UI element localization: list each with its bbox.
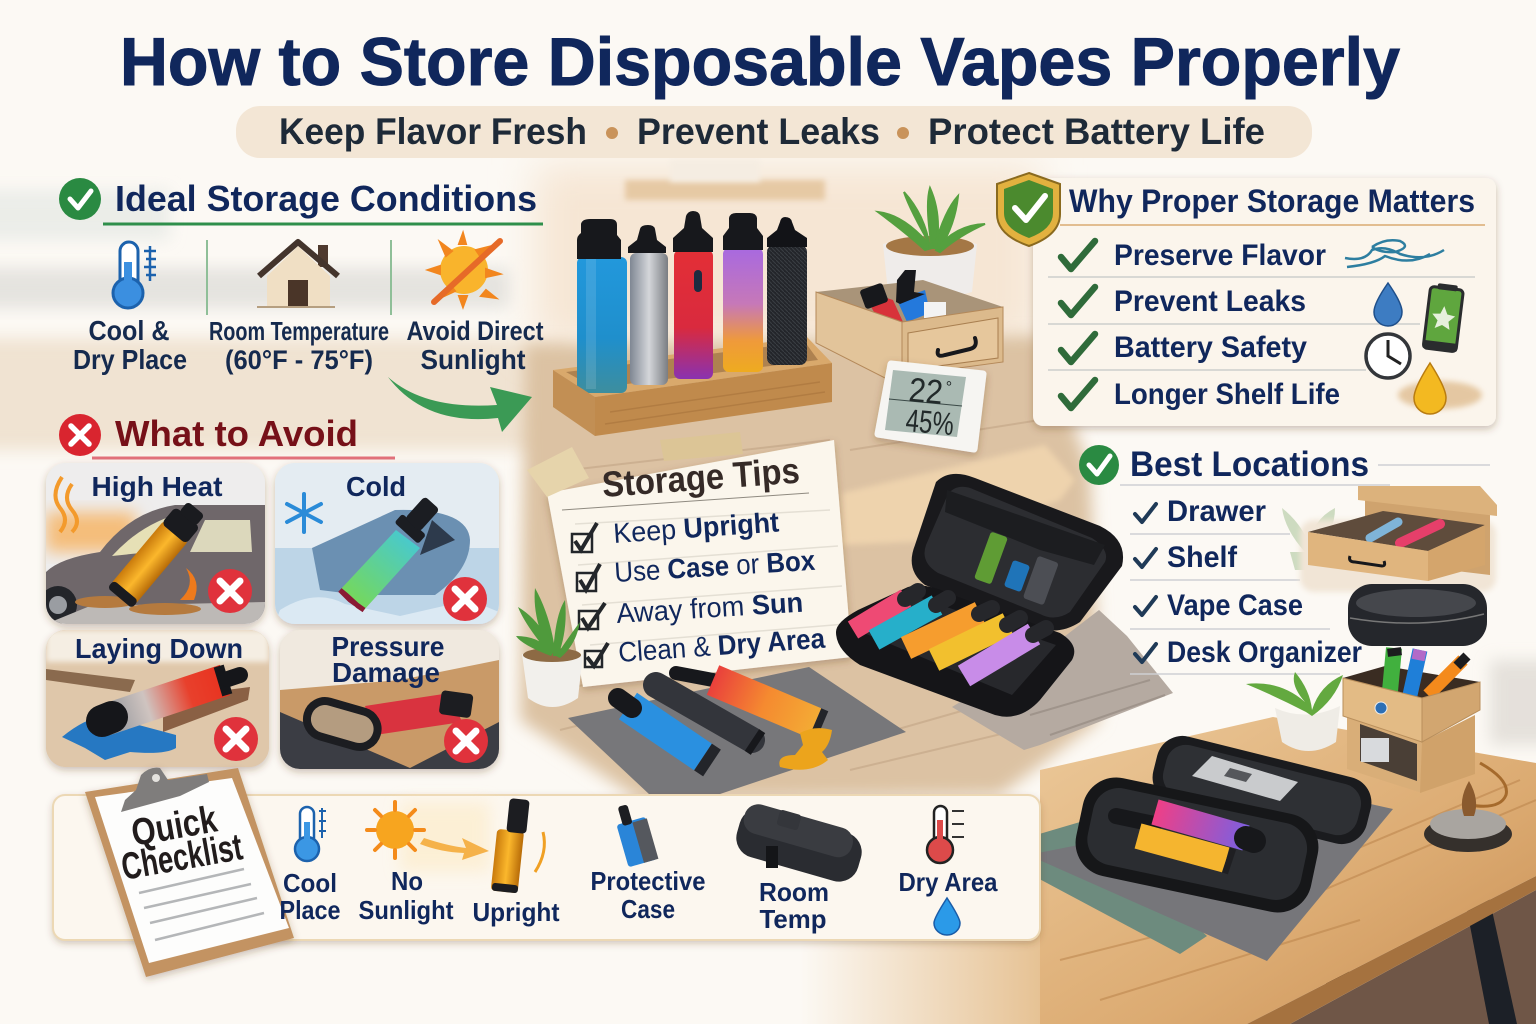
- panel: ideal storage conditions: [59, 178, 544, 375]
- icon: blue drop: [934, 898, 960, 935]
- panel: quick checklist: Room: [759, 877, 829, 907]
- panel: why proper storage matters: Preserve Flavor: [1114, 239, 1326, 272]
- panel: quick checklist: Sunlight: [358, 895, 454, 925]
- checkboxes: [572, 523, 608, 667]
- icon: desk bell: [1424, 763, 1512, 852]
- icon: protective case vape: [612, 800, 658, 867]
- subtitle pill: Protect Battery Life: [928, 111, 1265, 152]
- panel: best locations: Vape Case: [1167, 589, 1303, 622]
- icon: battery: [1422, 282, 1465, 352]
- open vape case: [836, 474, 1123, 717]
- panel: why proper storage matters: Why Proper Storage Matters: [1069, 183, 1475, 219]
- panel: what to avoid: [39, 413, 499, 770]
- panel: why proper storage matters: Battery Safety: [1114, 331, 1307, 364]
- mat with vapes: [568, 667, 906, 795]
- icon: shield: [997, 173, 1060, 246]
- panel: best locations: Shelf: [1167, 541, 1238, 574]
- icon: drawer: [1300, 486, 1497, 592]
- panel: quick checklist: Place: [280, 895, 340, 925]
- card: pressure damage: Pressure: [332, 631, 444, 662]
- storage tips note: Keep Upright: [612, 506, 780, 549]
- icon: oil drop: [1414, 363, 1446, 414]
- storage tips note: Use Case or Box: [613, 545, 816, 588]
- card: pressure damage: [280, 630, 499, 770]
- card: high heat: [39, 463, 265, 624]
- card: laying down: Laying Down: [75, 633, 243, 664]
- panel: ideal storage conditions: Ideal Storage Conditions: [115, 178, 537, 219]
- card: cold: [275, 463, 499, 628]
- clipboard: [85, 768, 294, 977]
- panel: ideal storage conditions: Sunlight: [420, 344, 526, 375]
- clipboard: Checklist: [118, 826, 246, 889]
- panel: quick checklist: Upright: [472, 897, 560, 927]
- icon: thermometer: [113, 242, 156, 308]
- icon: pen organizer: [1343, 648, 1480, 793]
- icon: snowflake: [287, 494, 321, 532]
- icon: clock: [1366, 334, 1410, 378]
- panel: ideal storage conditions: Dry Place: [73, 344, 187, 375]
- icon: cool thermometer: [295, 807, 326, 861]
- icon: upright vape: [491, 798, 544, 893]
- title: How to Store Disposable Vapes Properly: [120, 24, 1400, 100]
- icon: sun with arrow: [367, 802, 490, 872]
- icon: water drop: [1374, 283, 1402, 326]
- panel: why proper storage matters: Longer Shelf Life: [1114, 378, 1340, 411]
- icon: faded plant: [1282, 508, 1335, 570]
- arrow: green to tray: [388, 377, 532, 432]
- panel: ideal storage conditions: Cool &: [88, 315, 170, 346]
- panel: best locations: [1079, 445, 1512, 852]
- card: laying down: [46, 630, 269, 767]
- storage tips note: Storage Tips: [601, 450, 801, 505]
- tray of vapes: [553, 211, 832, 436]
- panel: quick checklist: Case: [621, 894, 675, 924]
- panel: why proper storage matters: [997, 173, 1496, 426]
- card: pressure damage: Damage: [332, 657, 440, 688]
- open case with mats: [985, 730, 1393, 961]
- subtitle pill: [236, 106, 1312, 158]
- icon: desk plant: [1246, 672, 1343, 751]
- subtitle pill: Keep Flavor Fresh: [279, 111, 587, 152]
- panel: why proper storage matters: Prevent Leaks: [1114, 285, 1306, 318]
- panel: quick checklist: Cool: [283, 868, 337, 898]
- panel: quick checklist: Dry Area: [898, 867, 998, 897]
- panel: ideal storage conditions: Avoid Direct: [406, 316, 544, 346]
- panel: best locations: Desk Organizer: [1167, 636, 1362, 669]
- clipboard: Quick: [128, 798, 221, 855]
- hygrometer: °: [945, 379, 953, 397]
- towel: [952, 610, 1173, 750]
- panel: best locations: Drawer: [1167, 495, 1266, 528]
- subtitle pill: Prevent Leaks: [637, 111, 880, 152]
- hygrometer: 45%: [904, 402, 955, 442]
- potted plant: [878, 188, 985, 298]
- card: high heat: High Heat: [92, 471, 222, 502]
- organizer box: [816, 270, 1003, 378]
- storage tips note: Clean & Dry Area: [617, 623, 826, 668]
- panel: ideal storage conditions: (60°F - 75°F): [225, 345, 373, 375]
- panel: what to avoid: What to Avoid: [115, 413, 358, 454]
- icon: warm thermometer: [927, 806, 964, 863]
- icon: house: [257, 242, 338, 307]
- panel: quick checklist: Temp: [760, 904, 826, 934]
- panel: quick checklist: No: [391, 866, 423, 896]
- hygrometer: [878, 364, 983, 449]
- panel: ideal storage conditions: Room Temperature: [209, 316, 389, 346]
- hygrometer: 22: [907, 371, 944, 412]
- panel: quick checklist: Protective: [590, 866, 706, 896]
- storage tips note: Away from Sun: [615, 587, 804, 629]
- panel: best locations: Best Locations: [1130, 445, 1369, 484]
- panel: quick checklist: [53, 768, 1040, 977]
- storage tips note: [527, 432, 852, 687]
- icon: flavor wave: [1345, 240, 1444, 267]
- card: cold: Cold: [346, 471, 406, 502]
- icon: closed black case: [732, 801, 866, 886]
- small succulent: [516, 588, 583, 707]
- icon: closed case: [1348, 584, 1487, 646]
- icon: sun crossed out: [428, 233, 500, 307]
